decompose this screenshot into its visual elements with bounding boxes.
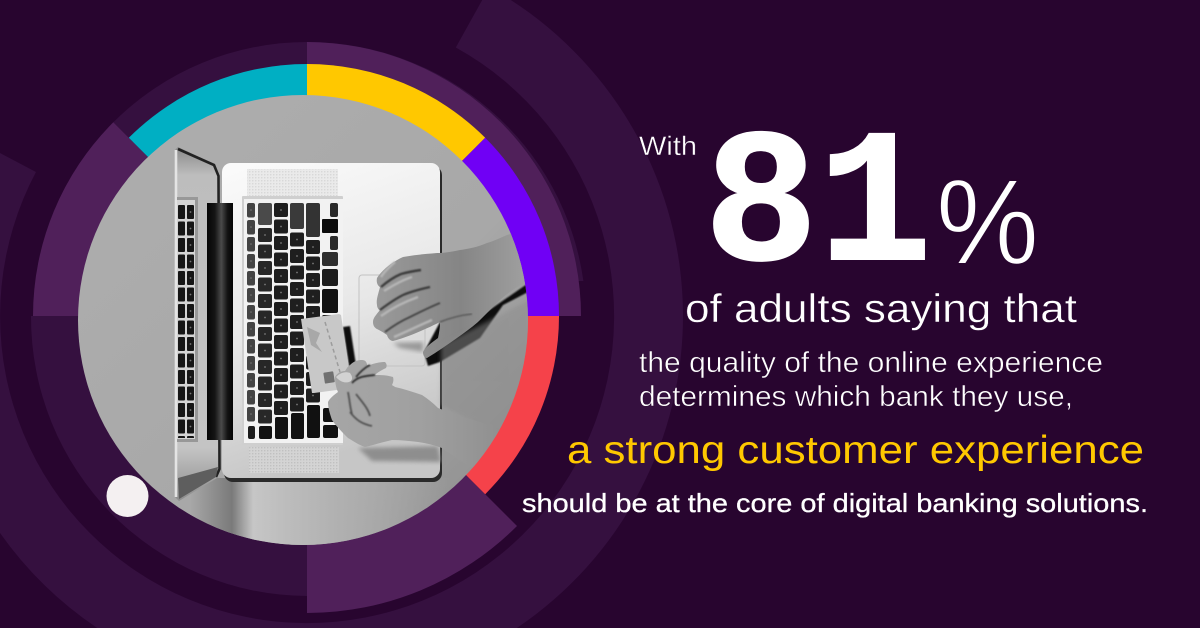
photo: laptop and hands holding a card bbox=[78, 95, 532, 548]
upper hand on trackpad bbox=[373, 228, 532, 358]
lower-right floor texture bbox=[438, 302, 528, 430]
text: yellow emphasis: a strong customer experience bbox=[567, 429, 1144, 472]
outer decorative ring bbox=[0, 0, 683, 628]
shadow of lower hand bbox=[358, 446, 441, 462]
segment: violet bbox=[307, 138, 559, 316]
trackpad bbox=[359, 275, 425, 366]
text: of adults saying that: of adults saying that bbox=[685, 287, 1077, 331]
middle ring segments bbox=[31, 42, 583, 613]
credit card bbox=[301, 314, 352, 393]
segment: teal bbox=[129, 64, 307, 316]
segment: red bbox=[307, 316, 559, 494]
text: percent sign: % bbox=[936, 154, 1039, 290]
text block: supporting sentence bbox=[639, 347, 1103, 413]
text block: headline statistic bbox=[639, 102, 1077, 331]
shadow of upper hand bbox=[393, 282, 530, 366]
text: closing line: should be at the core of digital banking solutions. bbox=[522, 488, 1148, 518]
text: 81: 81 bbox=[704, 102, 932, 317]
keyboard keys bbox=[247, 203, 338, 439]
laptop lid bbox=[175, 147, 221, 501]
text: quality line: the quality of the online experience bbox=[639, 347, 1103, 379]
laptop base bbox=[222, 163, 442, 482]
segment: yellow bbox=[307, 64, 485, 316]
lower hand holding card bbox=[328, 360, 500, 468]
coloured ring bbox=[129, 64, 559, 494]
card shadow bbox=[342, 325, 356, 366]
white dot bbox=[106, 475, 148, 517]
text: With: With bbox=[639, 131, 697, 161]
laptop hinge bbox=[207, 203, 233, 440]
text: determines line: determines which bank they use, bbox=[639, 381, 1073, 413]
